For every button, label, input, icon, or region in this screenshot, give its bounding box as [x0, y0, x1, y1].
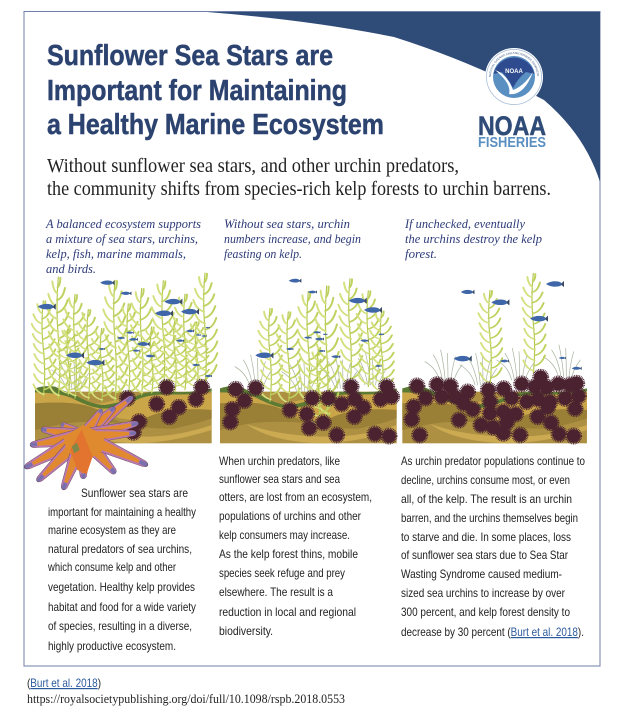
text block: sea star role: highly productive ecosystem.: [48, 639, 176, 653]
subtitle: the community shifts from species-rich kelp forests to urchin barrens.: [47, 179, 551, 200]
text block: sea star role: habitat and food for a wide variety: [48, 600, 196, 614]
text block: predators lost: elsewhere. The result is a: [219, 585, 333, 599]
illustration: urchins increasing: [220, 279, 399, 443]
caption: balanced ecosystem: a mixture of sea stars, urchins,: [46, 232, 198, 246]
NOAA logo: NOAA: [505, 69, 523, 75]
text block: urchin barren: decrease by 30 percent (Burt et al. 2018).: [401, 625, 584, 639]
illustration: urchin barren: [402, 273, 587, 443]
text block: urchin barren: of sunflower sea stars due to Sea Star: [401, 548, 568, 562]
text block: urchin barren: all, of the kelp. The result is an urchin: [401, 492, 572, 506]
caption: urchins increase: feasting on kelp.: [224, 247, 302, 261]
text block: urchin barren: sized sea urchins to increase by over: [401, 586, 565, 600]
title: [47, 40, 384, 141]
text block: predators lost: otters, are lost from an ecosystem,: [219, 490, 372, 504]
caption: urchins increase: Without sea stars, urchin: [224, 217, 350, 231]
subtitle: Without sunflower sea stars, and other urchin predators,: [47, 156, 459, 177]
caption: unchecked: If unchecked, eventually: [404, 217, 525, 231]
text block: sea star role: [47, 486, 196, 653]
citation: https://royalsocietypublishing.org/doi/full/10.1098/rspb.2018.0553: [27, 692, 345, 706]
text block: urchin barren: 300 percent, and kelp forest density to: [401, 605, 570, 619]
caption: balanced ecosystem: and birds.: [46, 262, 96, 276]
text block: sea star role: natural predators of sea urchins,: [48, 542, 192, 556]
text block: sea star role: vegetation. Healthy kelp provides: [48, 580, 195, 594]
subtitle: [47, 156, 551, 200]
text block: sea star role: marine ecosystem as they are: [48, 523, 176, 537]
text block: urchin barren: decline, urchins consume most, or even: [401, 473, 570, 487]
caption: balanced ecosystem: kelp, fish, marine mammals,: [46, 247, 186, 261]
NOAA Fisheries wordmark: FISHERIES: [478, 135, 546, 151]
title: a Healthy Marine Ecosystem: [47, 109, 384, 141]
title: Sunflower Sea Stars are: [47, 40, 333, 72]
icon: sunflower sea star: [21, 390, 151, 493]
text block: predators lost: sunflower sea stars and sea: [219, 472, 340, 486]
text block: urchin barren: barren, and the urchins themselves begin: [401, 511, 578, 525]
text block: urchin barren: Wasting Syndrome caused medium-: [401, 567, 562, 581]
text block: predators lost: biodiversity.: [219, 624, 273, 638]
citation: [27, 676, 345, 706]
text block: predators lost: species seek refuge and prey: [219, 566, 345, 580]
caption: urchins increase: numbers increase, and begin: [224, 232, 361, 246]
caption: balanced ecosystem: A balanced ecosystem supports: [45, 217, 201, 231]
text block: sea star role: which consume kelp and other: [47, 560, 176, 574]
text block: predators lost: When urchin predators, like: [219, 454, 340, 468]
text block: sea star role: important for maintaining a healthy: [48, 505, 196, 519]
caption: unchecked: the urchins destroy the kelp: [405, 232, 542, 246]
text block: predators lost: [219, 454, 372, 638]
text block: urchin barren: to starve and die. In some places, loss: [401, 530, 571, 544]
text block: sea star role: Sunflower sea stars are: [81, 486, 188, 500]
text block: urchin barren: [401, 454, 585, 639]
text block: predators lost: populations of urchins and other: [219, 509, 361, 523]
citation: (Burt et al. 2018): [27, 676, 101, 690]
NOAA Fisheries wordmark: NOAA: [478, 111, 546, 141]
text block: sea star role: of species, resulting in a diverse,: [48, 619, 192, 633]
caption: unchecked: forest.: [405, 247, 437, 261]
caption: unchecked: [404, 217, 542, 261]
NOAA logo: [486, 48, 543, 105]
caption: balanced ecosystem: [45, 217, 201, 276]
text block: predators lost: As the kelp forest thins, mobile: [219, 547, 358, 561]
NOAA Fisheries wordmark: [478, 111, 546, 151]
text block: predators lost: kelp consumers may increase.: [219, 528, 350, 542]
blue corner swoosh: [207, 12, 600, 182]
caption: urchins increase: [224, 217, 361, 261]
illustration: balanced kelp forest: [21, 273, 217, 493]
title: Important for Maintaining: [47, 75, 347, 107]
text block: predators lost: reduction in local and regional: [219, 605, 356, 619]
